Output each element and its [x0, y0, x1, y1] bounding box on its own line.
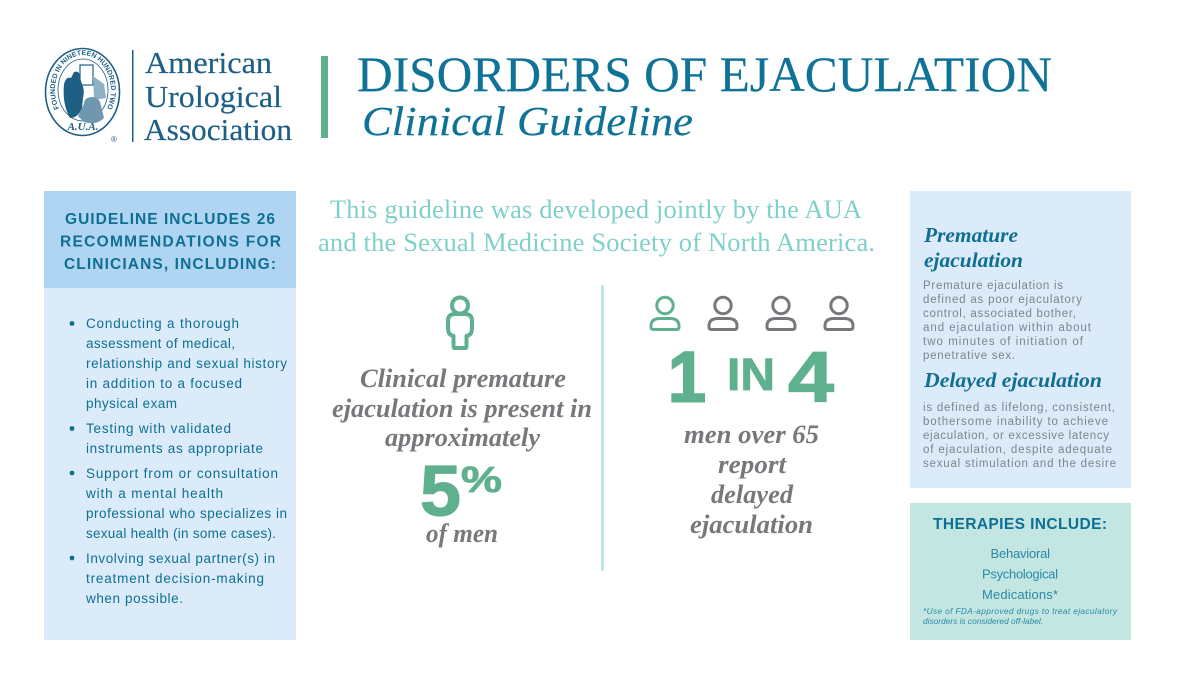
bullet: assessment: relationship and sexual history	[86, 356, 287, 371]
text: delayed definition: sexual stimulation and the desire	[923, 458, 1116, 470]
bullet: assessment: assessment of medical,	[86, 336, 235, 351]
text: men over 65 report delayed ejaculation: ejaculation	[690, 510, 813, 539]
bullet: partners: Involving sexual partner(s) in	[86, 551, 275, 566]
number: 1 in 4	[668, 338, 835, 418]
bullet: assessment	[70, 316, 287, 411]
text: premature definition: Premature ejaculation is	[923, 280, 1063, 292]
bullet: assessment: physical exam	[86, 396, 177, 411]
panel header	[44, 191, 296, 288]
divider	[601, 285, 604, 571]
title	[357, 46, 1052, 144]
list: therapies	[982, 546, 1058, 602]
text: premature definition: control, associated bother,	[923, 308, 1076, 320]
bullet: instruments: Testing with validated	[86, 421, 231, 436]
bullet: mental health: Support from or consultation	[86, 466, 278, 481]
bullet: mental health: sexual health (in some cases).	[86, 526, 276, 541]
heading: premature ejaculation	[923, 223, 1023, 272]
stat: delayed ejaculation 1 in 4	[651, 297, 853, 539]
text: delayed definition: bothersome inability to achieve	[923, 416, 1108, 428]
panel: therapies	[910, 503, 1131, 640]
bullet: partners: when possible.	[85, 591, 183, 606]
bullet: mental health: with a mental health	[85, 486, 223, 501]
list: therapies: Psychological	[982, 566, 1058, 582]
list: therapies: Behavioral	[990, 546, 1050, 561]
text: delayed definition: of ejaculation, despite adequate	[923, 444, 1112, 456]
text: delayed definition: ejaculation, or excessive latency	[923, 430, 1109, 442]
list: therapies: Medications*	[982, 587, 1058, 602]
intro statement	[318, 194, 875, 257]
text: men over 65 report delayed ejaculation: report	[718, 450, 787, 479]
text: men over 65 report delayed ejaculation: men over 65	[684, 420, 819, 449]
panel body: bullet list	[44, 288, 296, 640]
title: DISORDERS OF EJACULATION	[357, 46, 1052, 102]
intro statement: and the Sexual Medicine Society of North America.	[318, 227, 875, 257]
panel header: RECOMMENDATIONS FOR	[60, 234, 281, 250]
panel header: CLINICIANS, INCLUDING:	[64, 256, 276, 273]
bullet: assessment: in addition to a focused	[86, 376, 242, 391]
panel: definitions	[910, 191, 1131, 488]
heading: therapies include: THERAPIES INCLUDE:	[933, 516, 1107, 533]
icon: person	[448, 298, 472, 348]
number: 1 in 4: 1	[668, 338, 706, 418]
footnote	[923, 606, 1118, 626]
text: premature definition	[923, 280, 1092, 362]
icons: four people	[651, 297, 853, 330]
icon: association seal: FOUNDED IN NINETEEN HUNDRED TWO	[50, 50, 116, 110]
bullet: partners	[70, 551, 275, 606]
icon: association seal: A.U.A.	[67, 121, 98, 133]
text: of men: of men	[426, 519, 498, 548]
text: premature definition: defined as poor ejaculatory	[923, 294, 1082, 306]
heading: delayed ejaculation: Delayed ejaculation	[923, 368, 1102, 392]
logo: American Urological Association	[44, 45, 293, 147]
number: 5%	[420, 452, 502, 532]
intro statement: This guideline was developed jointly by the AUA	[330, 194, 862, 224]
title: Clinical Guideline	[362, 98, 693, 144]
text: premature definition: and ejaculation within about	[923, 322, 1092, 334]
bullet: partners: treatment decision-making	[86, 571, 264, 586]
number: 5%: %	[461, 459, 502, 500]
bullet: instruments	[70, 421, 263, 456]
icon: association seal: ®	[111, 135, 117, 144]
heading: premature ejaculation: ejaculation	[924, 248, 1023, 272]
footnote: disorders is considered off-label.	[923, 616, 1043, 626]
text: prevalence statement: ejaculation is present in	[332, 394, 592, 423]
text: men over 65 report delayed ejaculation	[684, 420, 819, 539]
number: 1 in 4: IN	[727, 349, 775, 400]
bullet: instruments: instruments as appropriate	[86, 441, 263, 456]
icon: association seal	[44, 48, 120, 144]
bullet: assessment: Conducting a thorough	[86, 316, 239, 331]
bullet: mental health	[70, 466, 287, 541]
text: prevalence statement: Clinical premature	[360, 364, 566, 393]
text: association name: American	[145, 45, 273, 80]
text: men over 65 report delayed ejaculation: delayed	[711, 480, 794, 509]
panel header: GUIDELINE INCLUDES 26	[65, 211, 275, 228]
text: delayed definition: is defined as lifelong, consistent,	[923, 402, 1115, 414]
stat: premature ejaculation 5%	[332, 298, 592, 548]
number: 5%: 5	[420, 452, 461, 532]
bullet: mental health: professional who specializes in	[86, 506, 287, 521]
text: association name	[144, 45, 293, 147]
text: association name: Association	[144, 112, 293, 147]
number: 1 in 4: 4	[788, 338, 835, 418]
panel: recommendations	[44, 191, 296, 640]
text: delayed definition	[923, 402, 1116, 470]
text: prevalence statement	[332, 364, 592, 452]
title accent bar	[321, 56, 328, 138]
heading: premature ejaculation: Premature	[923, 223, 1018, 247]
text: premature definition: penetrative sex.	[923, 350, 1015, 362]
text: prevalence statement: approximately	[385, 423, 540, 452]
footnote: *Use of FDA-approved drugs to treat ejaculatory	[923, 606, 1118, 616]
text: premature definition: two minutes of initiation of	[923, 336, 1084, 348]
text: association name: Urological	[145, 79, 282, 114]
